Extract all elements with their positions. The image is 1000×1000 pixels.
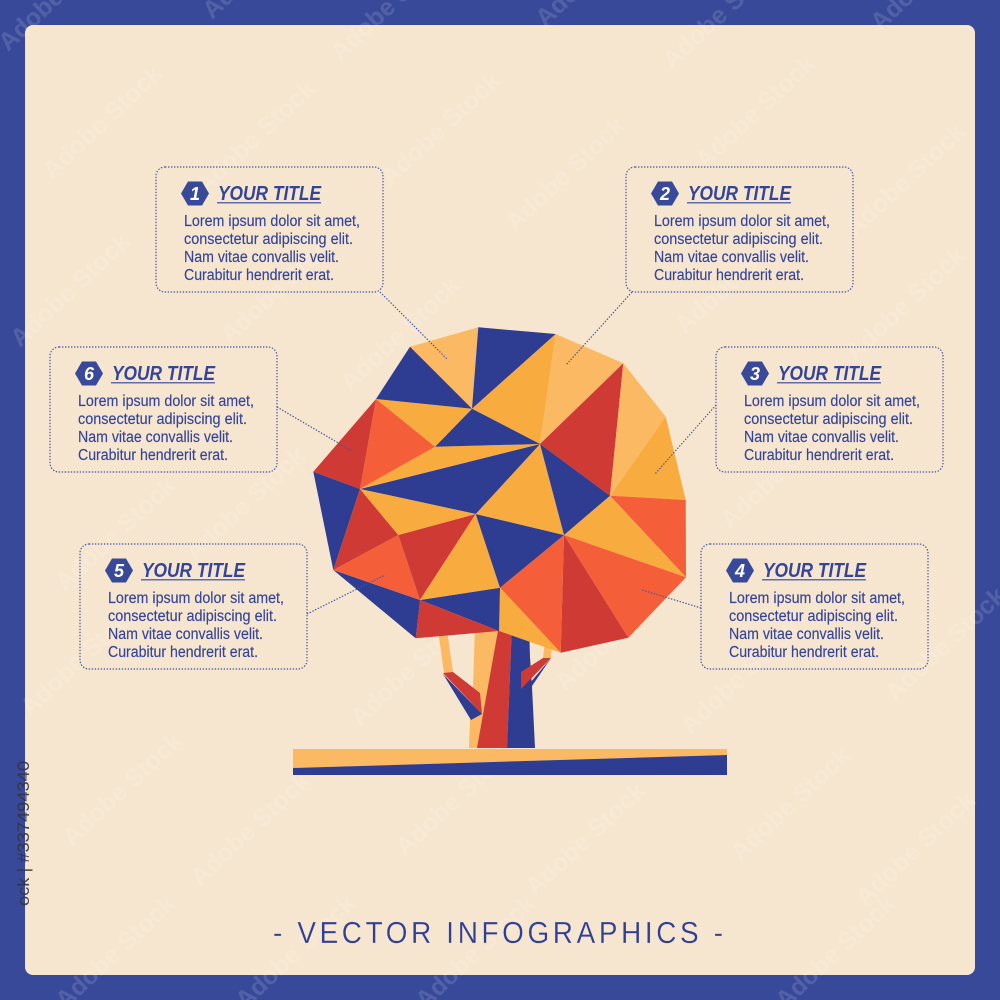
text: Adobe Stock (500, 112, 631, 236)
callout 4: Nam vitae convallis velit. (729, 626, 884, 643)
callout 2 (566, 167, 853, 365)
callout 6: Curabitur hendrerit erat. (78, 447, 228, 464)
text: Adobe Stock (375, 67, 506, 191)
text: Adobe Stock (715, 410, 846, 534)
text: Adobe Stock (215, 225, 346, 349)
callout 3 (655, 347, 943, 474)
callout 3: 3 (750, 364, 760, 384)
callout 1: 1 (190, 184, 200, 204)
callout 2: YOUR TITLE (688, 182, 792, 205)
callout 4 (642, 544, 928, 669)
callout 3: Nam vitae convallis velit. (744, 429, 899, 446)
ground (293, 749, 727, 775)
text: Adobe Stock (345, 607, 476, 731)
text: Adobe Stock (15, 597, 146, 721)
callout 3: Lorem ipsum dolor sit amet, (744, 393, 920, 410)
text: Adobe Stock (50, 472, 181, 596)
callout 6: 6 (84, 364, 95, 384)
callout 1: YOUR TITLE (218, 182, 322, 205)
text: Adobe Stock (550, 572, 681, 696)
callout 3: YOUR TITLE (778, 362, 882, 385)
callout 2: Nam vitae convallis velit. (654, 249, 809, 266)
main footer title: - VECTOR INFOGRAPHICS - (273, 916, 723, 950)
callout 5: YOUR TITLE (142, 559, 246, 582)
callout 4: consectetur adipiscing elit. (729, 608, 898, 625)
callout 2: Curabitur hendrerit erat. (654, 267, 804, 284)
callout 6 (50, 347, 352, 472)
text: Adobe Stock (690, 50, 821, 174)
text: Adobe Stock (840, 242, 971, 366)
text: Adobe Stock (390, 737, 521, 861)
text: Adobe Stock (850, 787, 981, 911)
callout 5: Lorem ipsum dolor sit amet, (108, 590, 284, 607)
callout 3: consectetur adipiscing elit. (744, 411, 913, 428)
text: Adobe Stock (37, 60, 168, 184)
callout 4: Lorem ipsum dolor sit amet, (729, 590, 905, 607)
callout 5: 5 (114, 561, 125, 581)
stock id label: ock | #337494340 (14, 761, 33, 906)
callout 1: Nam vitae convallis velit. (184, 249, 339, 266)
text: Adobe Stock (840, 118, 971, 242)
text: Adobe Stock (180, 442, 311, 566)
text: Adobe Stock (725, 742, 856, 866)
callout 2: consectetur adipiscing elit. (654, 231, 823, 248)
callout 6: consectetur adipiscing elit. (78, 411, 247, 428)
callout 5: Nam vitae convallis velit. (108, 626, 263, 643)
text: Adobe Stock (5, 228, 136, 352)
callout 6: Nam vitae convallis velit. (78, 429, 233, 446)
text: Adobe Stock (190, 75, 321, 199)
callout 1: consectetur adipiscing elit. (184, 231, 353, 248)
callout 1: Lorem ipsum dolor sit amet, (184, 213, 360, 230)
callout 1 (156, 167, 447, 359)
callout 5: consectetur adipiscing elit. (108, 608, 277, 625)
callout 6: YOUR TITLE (112, 362, 216, 385)
callout 5 (80, 544, 385, 669)
callout 3: Curabitur hendrerit erat. (744, 447, 894, 464)
callout 4: YOUR TITLE (763, 559, 867, 582)
polygonal tree crown (313, 327, 686, 653)
callout 2: Lorem ipsum dolor sit amet, (654, 213, 830, 230)
text: Adobe Stock (57, 727, 188, 851)
text: Adobe Stock (675, 615, 806, 739)
tree trunk and branches (438, 625, 552, 748)
callout 4: 4 (734, 561, 745, 581)
callout 5: Curabitur hendrerit erat. (108, 644, 258, 661)
text: Adobe Stock (670, 215, 801, 339)
callout 1: Curabitur hendrerit erat. (184, 267, 334, 284)
callout 2: 2 (659, 184, 670, 204)
text: Adobe Stock (185, 767, 316, 891)
callout 4: Curabitur hendrerit erat. (729, 644, 879, 661)
text: Adobe Stock (335, 272, 466, 396)
callout 6: Lorem ipsum dolor sit amet, (78, 393, 254, 410)
text: Adobe Stock (520, 777, 651, 901)
